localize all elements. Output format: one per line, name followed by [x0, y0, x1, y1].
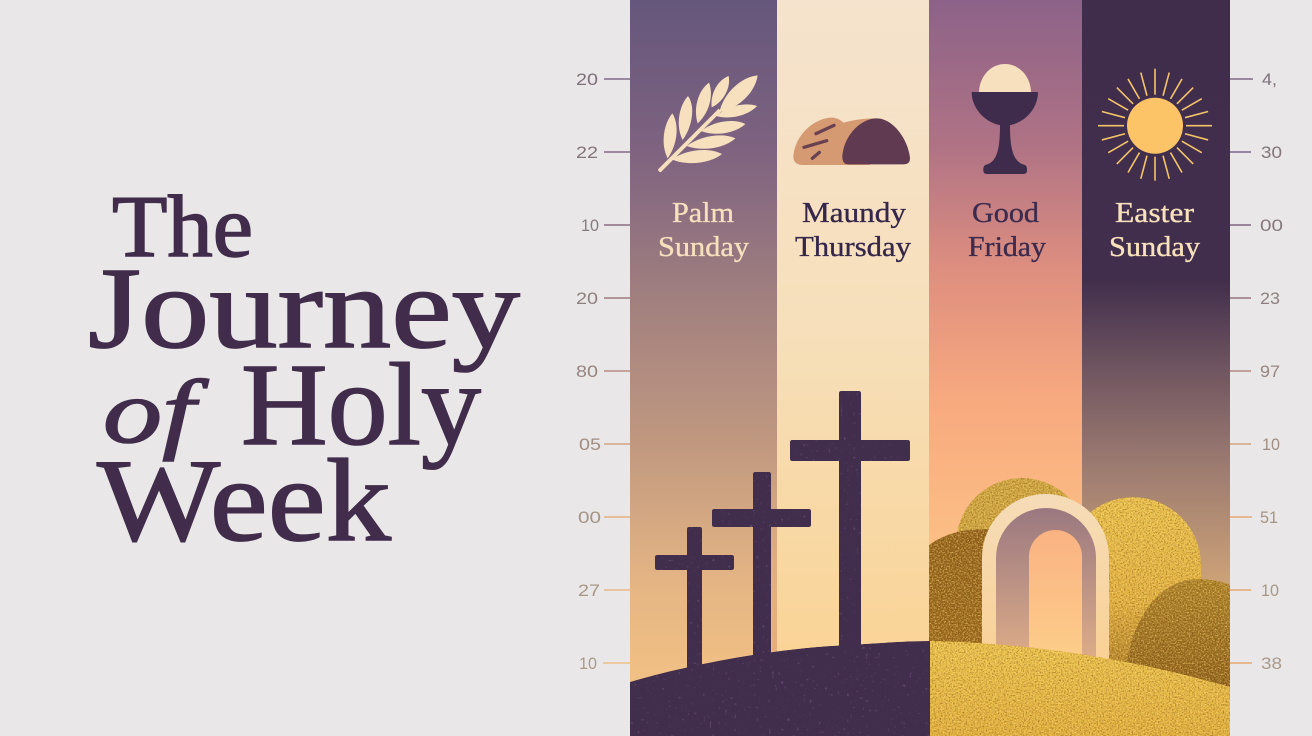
left time scale: 05	[579, 435, 601, 454]
label: Easter Sunday: Easter	[1115, 197, 1194, 229]
hill: left bronze	[929, 529, 989, 644]
right time scale: 10	[1261, 581, 1279, 600]
left time scale: 20	[576, 70, 598, 89]
left time scale: 80	[576, 362, 598, 381]
left time scale: 20	[576, 289, 598, 308]
right time scale: 51	[1260, 508, 1278, 527]
right time scale: 38	[1261, 654, 1282, 673]
tomb arch frame	[982, 494, 1109, 670]
icon: palm branch	[658, 75, 758, 172]
label: Palm Sunday: Palm	[672, 197, 734, 229]
right time scale: 4,	[1262, 70, 1277, 89]
column: Maundy Thursday	[777, 0, 929, 736]
title	[88, 179, 520, 566]
label: Good Friday: Friday	[968, 231, 1047, 263]
title: of	[103, 363, 209, 462]
right time scale: 30	[1261, 143, 1282, 162]
cross: large	[790, 391, 910, 660]
column: Easter Sunday	[1082, 0, 1230, 736]
label: Maundy Thursday	[795, 197, 912, 263]
cross: middle	[712, 472, 811, 665]
label: Maundy Thursday: Thursday	[795, 231, 912, 263]
foreground gold hill	[929, 641, 1230, 736]
column: Good Friday	[929, 0, 1082, 736]
title: Holy	[241, 339, 481, 470]
cross: small	[655, 527, 734, 675]
label: Palm Sunday: Sunday	[658, 231, 750, 263]
icon: radiant sun	[1098, 69, 1212, 181]
icon: chalice and host	[972, 64, 1038, 174]
title: The	[112, 179, 253, 276]
right time scale: 10	[1262, 435, 1280, 454]
label: Good Friday	[968, 197, 1047, 263]
left time scale: 22	[576, 143, 598, 162]
right time scale	[1230, 70, 1283, 673]
left time scale: 00	[578, 508, 601, 527]
label: Easter Sunday	[1109, 197, 1201, 263]
right time scale: 97	[1260, 362, 1280, 381]
hill: back right gold	[1090, 497, 1201, 662]
tomb doorway	[1029, 530, 1082, 654]
left time scale: 10	[581, 216, 599, 235]
right time scale: 00	[1260, 216, 1283, 235]
Calvary hill and three crosses	[630, 391, 930, 736]
left time scale: 10	[579, 654, 597, 673]
column edge shadow	[772, 500, 777, 660]
right time scale: 23	[1260, 289, 1280, 308]
icon: bread	[793, 118, 910, 165]
title: Week	[97, 435, 391, 566]
tomb landscape	[929, 478, 1230, 736]
tomb arch interior	[996, 508, 1096, 670]
label: Palm Sunday	[658, 197, 750, 263]
label: Maundy Thursday: Maundy	[802, 197, 907, 229]
label: Good Friday: Good	[972, 197, 1040, 229]
label: Easter Sunday: Sunday	[1109, 231, 1201, 263]
title: Journey	[88, 245, 520, 373]
hill: right front bronze	[1127, 579, 1230, 687]
left time scale: 27	[578, 581, 600, 600]
hill: dark Calvary	[630, 641, 930, 736]
hill: back left gold	[957, 478, 1070, 532]
left time scale	[576, 70, 630, 673]
column: Palm Sunday	[630, 0, 777, 736]
